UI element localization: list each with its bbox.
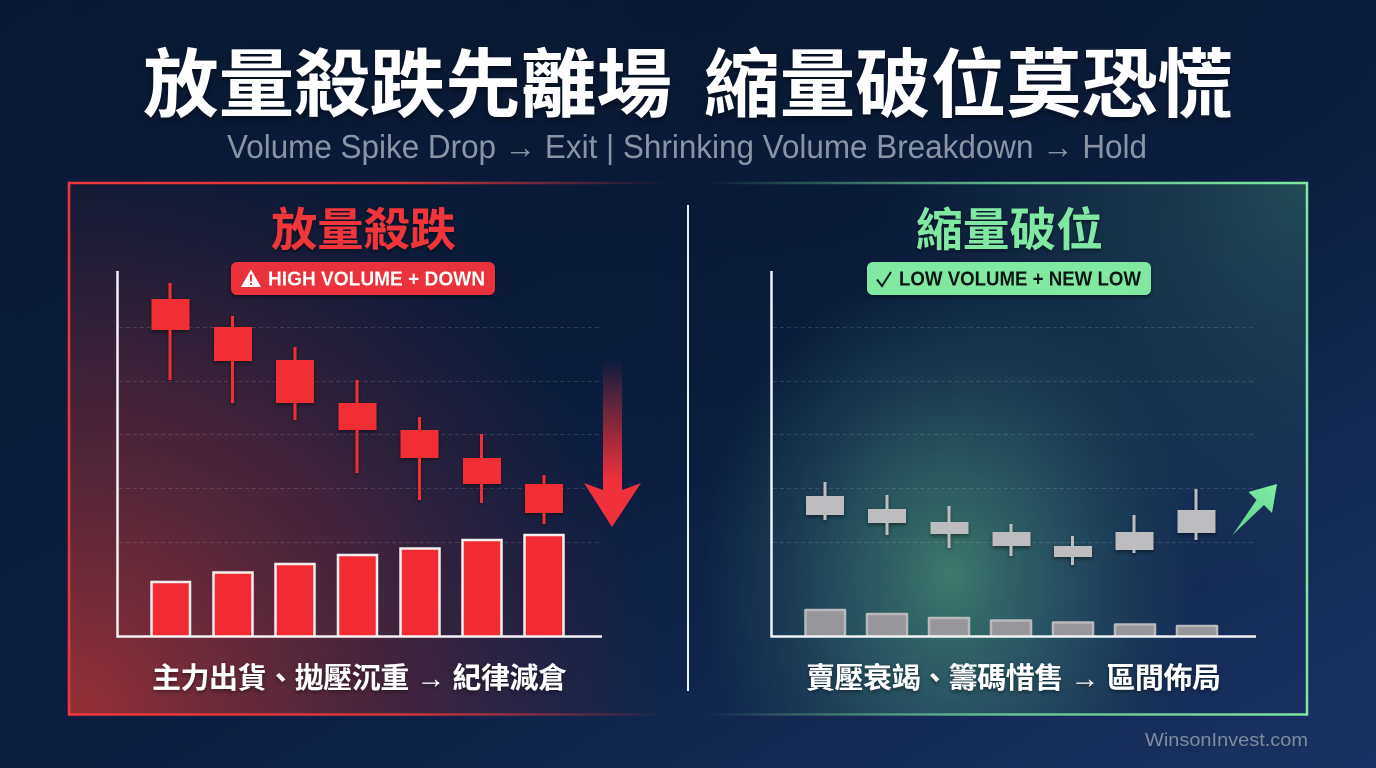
subtitle: Volume Spike Drop → Exit | Shrinking Volume Breakdown → Hold	[227, 128, 1147, 165]
axes	[772, 271, 1256, 636]
arrow: green up	[1232, 484, 1277, 535]
watermark: WinsonInvest.com	[1145, 729, 1308, 750]
caption: right conclusion: 賣壓衰竭、籌碼惜售 → 區間佈局	[806, 662, 1221, 695]
volume bars: grey shrinking	[806, 610, 1217, 636]
volume bars: red rising	[152, 535, 564, 636]
heading: 放量殺跌: 放量殺跌	[271, 204, 456, 256]
chart: red candlesticks and rising volume	[118, 271, 602, 636]
divider	[687, 205, 689, 691]
badge: high volume + down: HIGH VOLUME + DOWN	[268, 268, 485, 290]
caption: left conclusion: 主力出貨、拋壓沉重 → 紀律減倉	[152, 662, 567, 695]
arrow: red down	[584, 360, 641, 527]
chart: grey candlesticks and shrinking volume	[772, 271, 1256, 636]
title	[143, 43, 1233, 127]
badge: high volume + down	[231, 262, 495, 295]
axes	[118, 271, 602, 636]
heading: 縮量破位: 縮量破位	[916, 204, 1103, 256]
candlesticks: grey small range	[806, 482, 1216, 565]
badge: low volume + new low	[867, 262, 1151, 295]
panel: low volume breakdown	[700, 182, 1308, 715]
title: 放量殺跌先離場	[143, 43, 672, 127]
title: 縮量破位莫恐慌	[704, 43, 1233, 127]
panel: high volume drop	[68, 182, 678, 715]
badge: low volume + new low: LOW VOLUME + NEW LOW	[899, 268, 1141, 290]
candlesticks: red falling	[152, 283, 563, 524]
